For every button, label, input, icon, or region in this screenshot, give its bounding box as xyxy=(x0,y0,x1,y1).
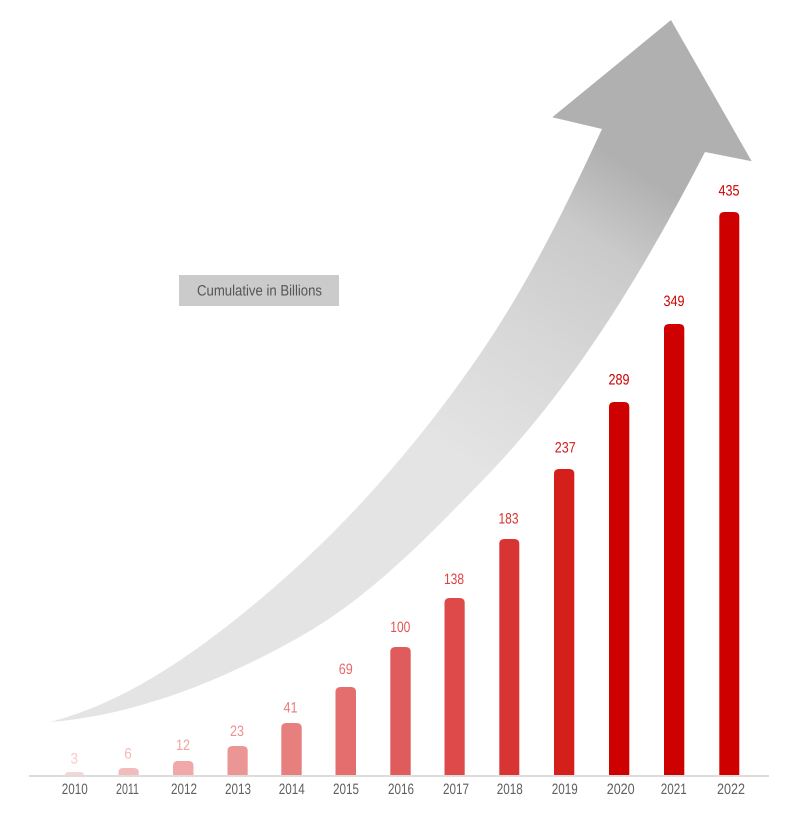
growth arrow xyxy=(50,20,752,722)
bar 2016: 100 xyxy=(390,619,410,636)
bar 2010 xyxy=(62,750,88,798)
axis baseline xyxy=(29,775,769,777)
bar 2010: 3 xyxy=(70,750,78,768)
bar 2012 xyxy=(171,737,197,798)
bar 2015: 69 xyxy=(339,661,353,678)
bar 2013: 2013 xyxy=(225,781,251,798)
bar 2020: 289 xyxy=(608,372,630,388)
bar 2014: 41 xyxy=(284,700,298,716)
bar 2014 xyxy=(279,700,305,798)
bar 2016 xyxy=(388,619,414,798)
bar 2013 xyxy=(225,723,251,798)
legend label: Cumulative in Billions xyxy=(179,275,339,306)
bar 2021: 349 xyxy=(664,293,684,310)
bar 2018: 183 xyxy=(498,510,518,528)
bar 2015: 2015 xyxy=(333,781,359,798)
bar 2015 xyxy=(333,661,359,798)
bar 2018: 2018 xyxy=(497,781,523,798)
bar 2012: 2012 xyxy=(171,781,197,798)
bar 2017: 2017 xyxy=(443,781,469,798)
bar 2011 xyxy=(116,746,139,798)
bar 2011: 2011 xyxy=(116,781,139,798)
bar 2021 xyxy=(661,293,687,798)
bar 2020: 2020 xyxy=(607,781,635,798)
bar 2017 xyxy=(443,571,469,798)
bar 2019 xyxy=(552,440,578,798)
bar 2013: 23 xyxy=(230,723,244,740)
bar 2016: 2016 xyxy=(388,781,414,798)
bar 2017: 138 xyxy=(444,571,464,588)
bar 2020 xyxy=(607,372,635,798)
bar 2019: 237 xyxy=(555,440,576,456)
bar 2012: 12 xyxy=(176,737,190,754)
bar 2019: 2019 xyxy=(552,781,578,798)
bar 2022 xyxy=(717,182,745,798)
bar chart xyxy=(62,182,745,798)
bar 2010: 2010 xyxy=(62,781,88,798)
legend label: Cumulative in Billions: Cumulative in Billions xyxy=(197,282,322,300)
bar 2021: 2021 xyxy=(661,781,687,798)
bar 2014: 2014 xyxy=(279,781,305,798)
bar 2022: 2022 xyxy=(717,781,745,798)
bar 2022: 435 xyxy=(718,182,740,200)
bar 2011: 6 xyxy=(124,746,132,762)
bar 2018 xyxy=(497,510,523,798)
